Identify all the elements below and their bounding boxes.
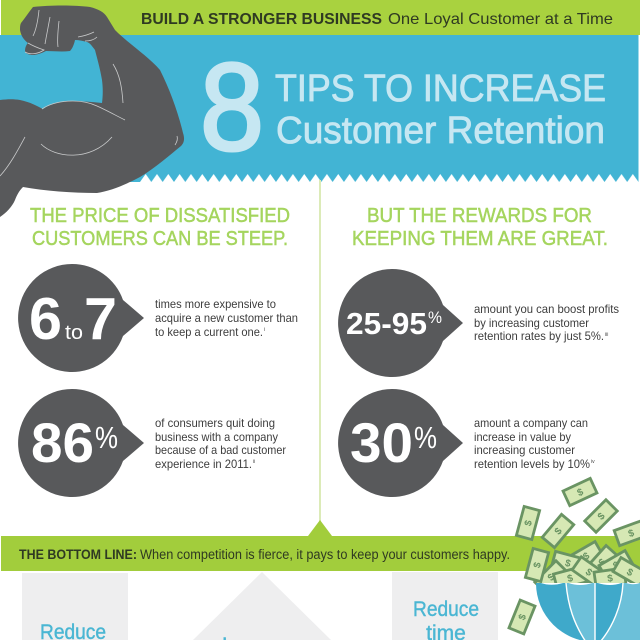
- title text: [275, 68, 606, 152]
- stat bubble: 30%: [338, 389, 463, 497]
- panel: reduce time: [392, 572, 498, 640]
- banner headline: [141, 11, 613, 28]
- text: boost profits: [474, 302, 619, 343]
- text: company value: increase in value by: [474, 430, 571, 444]
- falling bills: $: [523, 519, 535, 527]
- falling bills: $: [607, 573, 614, 585]
- heading: rewards: KEEPING THEM ARE GREAT.: [352, 228, 608, 250]
- stat bubble: 30%: 30: [350, 411, 413, 474]
- stat bubble: 25-95%: 25-95: [346, 306, 427, 341]
- title text: Customer Retention: [276, 110, 605, 152]
- falling bills: $: [611, 559, 622, 572]
- text: cost of new customer: times more expensive to: [155, 297, 276, 311]
- falling bills: $: [546, 572, 558, 584]
- text: company value: increasing customer: [474, 443, 575, 457]
- heading: price of dissatisfied customers: [30, 205, 290, 250]
- text: company value: amount a company can: [474, 416, 588, 430]
- icon: flexed arm: [0, 6, 184, 217]
- heading: rewards: BUT THE REWARDS FOR: [367, 205, 592, 227]
- heading: price of dissatisfied customers: CUSTOMERS CAN BE STEEP.: [32, 228, 288, 250]
- heading: price of dissatisfied customers: THE PRICE OF DISSATISFIED: [30, 205, 290, 227]
- falling bills: $: [566, 573, 575, 585]
- divider: [319, 180, 321, 525]
- text: cost of new customer: i: [264, 327, 265, 333]
- text: company value: [474, 416, 595, 471]
- icon: umbrella catching money: [509, 478, 640, 640]
- falling bills: $: [532, 561, 544, 569]
- text: company value: retention levels by 10%: [474, 457, 590, 471]
- falling bills: $: [553, 526, 565, 537]
- panel: reduce time: Reduce: [413, 598, 479, 621]
- stat bubble: 6 to 7: to: [65, 322, 83, 344]
- text: boost profits: by increasing customer: [474, 316, 589, 330]
- title text: TIPS TO INCREASE: [275, 68, 606, 110]
- text: consumers quit: [155, 416, 286, 471]
- falling bills: $: [627, 528, 636, 540]
- text: consumers quit: business with a company: [155, 430, 278, 444]
- falling bills: $: [583, 567, 594, 579]
- umbrella canopy: [536, 583, 640, 640]
- stat bubble: 86%: 86: [31, 411, 94, 474]
- bottom line banner: [1, 520, 640, 571]
- text: boost profits: retention rates by just 5%.: [474, 329, 604, 343]
- stat bubble: 6 to 7: 6: [29, 286, 62, 352]
- text: consumers quit: experience in 2011.: [155, 457, 252, 471]
- text: cost of new customer: [155, 297, 298, 339]
- falling bills: $: [624, 567, 635, 579]
- stat bubble: 6 to 7: [18, 264, 144, 372]
- falling bills: $: [597, 557, 609, 568]
- stat bubble: 6 to 7: 7: [84, 286, 117, 352]
- stat bubble: 86%: %: [95, 420, 118, 455]
- title panel: [0, 35, 640, 182]
- header banner: [1, 0, 640, 35]
- stat bubble: 25-95%: %: [428, 308, 442, 327]
- text: consumers quit: of consumers quit doing: [155, 416, 275, 430]
- falling bills: $: [596, 511, 608, 523]
- bottom line text: When competition is fierce, it pays to keep your customers happy.: [140, 547, 510, 562]
- text: cost of new customer: to keep a current one.: [155, 325, 263, 339]
- panel: increase: [193, 572, 331, 640]
- panel: reduce: [22, 573, 128, 640]
- falling bills: [509, 478, 640, 634]
- falling bills: $: [581, 550, 592, 563]
- stat bubble: 25-95%: [338, 269, 463, 377]
- heading: rewards: [352, 205, 608, 250]
- stat bubble: 30%: %: [414, 420, 437, 455]
- stat bubble: 86%: [18, 389, 144, 497]
- title number 8: 8: [200, 39, 264, 177]
- text: boost profits: iii: [605, 332, 608, 338]
- text: boost profits: amount you can boost profits: [474, 302, 619, 316]
- banner headline: BUILD A STRONGER BUSINESS: [141, 11, 382, 28]
- banner headline: One Loyal Customer at a Time: [388, 11, 613, 28]
- text: company value: iv: [591, 459, 595, 465]
- text: consumers quit: ii: [253, 459, 255, 465]
- falling bills: $: [517, 612, 529, 622]
- bottom line text: THE BOTTOM LINE:: [19, 547, 137, 562]
- falling bills: $: [576, 487, 586, 499]
- text: consumers quit: because of a bad customer: [155, 443, 286, 457]
- text: cost of new customer: acquire a new customer than: [155, 311, 298, 325]
- falling bills: $: [564, 558, 572, 570]
